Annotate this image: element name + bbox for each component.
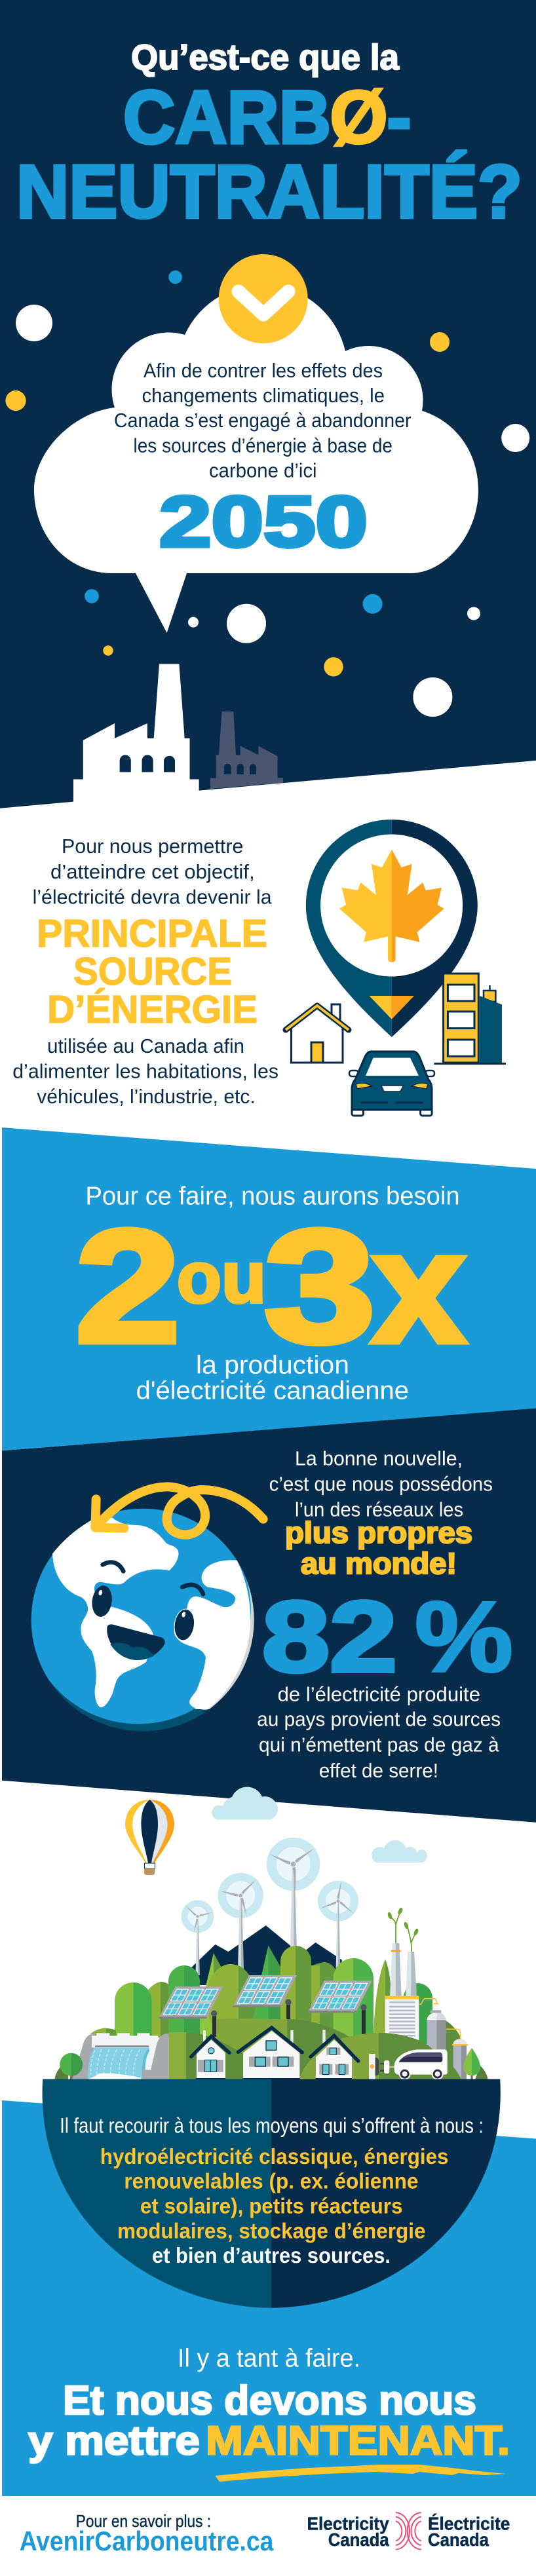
panel: half-disc platform bbox=[43, 2079, 501, 2308]
section text: bonne nouvelle: La bonne nouvelle, bbox=[295, 1447, 463, 1470]
small tree right bbox=[463, 2048, 480, 2079]
section text: objectif: véhicules, l’industrie, etc. bbox=[37, 1085, 256, 1108]
platform text: renouvelables (p. ex. éolienne bbox=[124, 2169, 418, 2193]
cloud text: changements climatiques, le bbox=[142, 384, 385, 407]
closing message: Et nous devons nous bbox=[63, 2378, 476, 2423]
solar panel 2 bbox=[233, 1975, 297, 2020]
section text: bonne nouvelle: l’un des réseaux les bbox=[295, 1498, 463, 1521]
title: NEUTRALITÉ? bbox=[16, 150, 522, 234]
section text: production: la production bbox=[196, 1352, 349, 1380]
closing message: Il y a tant à faire. bbox=[178, 2344, 360, 2372]
hydro dam bbox=[72, 2033, 169, 2079]
title: - bbox=[387, 76, 412, 160]
section text: bonne nouvelle: au monde! bbox=[301, 1547, 457, 1580]
big number: 2 ou 3x: 3 bbox=[264, 1196, 375, 1376]
platform text bbox=[60, 2114, 484, 2267]
section text: bonne nouvelle: plus propres bbox=[285, 1516, 472, 1549]
background: closing blue band bbox=[2, 2100, 536, 2496]
big number: 82 % bbox=[262, 1581, 513, 1693]
icon: hot air balloon bbox=[125, 1800, 174, 1875]
section text: objectif: PRINCIPALE bbox=[37, 912, 267, 955]
icon: map pin with maple leaf bbox=[306, 820, 478, 1037]
year 2050: 2050 bbox=[159, 482, 368, 562]
icon: smiling globe bbox=[31, 1508, 254, 1732]
background: navy band bbox=[2, 1409, 536, 1823]
section text: 82 details: qui n’émettent pas de gaz à bbox=[259, 1733, 499, 1756]
footer: Electricity Canada logo: Canada bbox=[328, 2529, 389, 2550]
arrow: looping yellow arrow bbox=[95, 1487, 263, 1535]
closing message: y mettre bbox=[28, 2419, 200, 2463]
icon: cloud right bbox=[372, 1840, 427, 1863]
icon: cloud left bbox=[212, 1787, 278, 1820]
brush underline bbox=[216, 2465, 506, 2482]
sprout leaves bbox=[387, 1907, 419, 1936]
footer: Electricity Canada logo: Électricite bbox=[428, 2513, 510, 2533]
cloud text: carbone d’ici bbox=[209, 459, 317, 482]
title: CARB bbox=[123, 76, 331, 160]
big number: 2 ou 3x: x bbox=[372, 1199, 465, 1376]
mountains bbox=[188, 1925, 342, 1985]
section text: 82 details: de l’électricité produite bbox=[278, 1683, 480, 1706]
section text: objectif: utilisée au Canada afin bbox=[47, 1034, 244, 1057]
platform text: et bien d’autres sources. bbox=[152, 2243, 391, 2267]
closing message: MAINTENANT. bbox=[206, 2419, 510, 2463]
section text: objectif: SOURCE bbox=[73, 950, 232, 993]
section text: 82 details: au pays provient de sources bbox=[257, 1707, 501, 1731]
section text: production bbox=[136, 1352, 409, 1405]
houses 2 and 3 bbox=[238, 2028, 358, 2079]
cloud text bbox=[114, 359, 412, 482]
title bbox=[16, 37, 522, 234]
section text: bonne nouvelle bbox=[269, 1447, 493, 1580]
section text: objectif bbox=[12, 835, 278, 1108]
footer: Electricity Canada logo bbox=[307, 2512, 510, 2550]
footer: Electricity Canada logo: Electricity bbox=[307, 2513, 389, 2533]
section text: bonne nouvelle: c’est que nous possédons bbox=[269, 1472, 493, 1495]
electric van bbox=[394, 2049, 448, 2080]
house 1 bbox=[191, 2030, 229, 2079]
cloud text: Canada s’est engagé à abandonner bbox=[114, 409, 412, 432]
cloud text: Afin de contrer les effets des bbox=[144, 359, 383, 382]
wind turbine 3 bbox=[181, 1900, 214, 1975]
platform text: hydroélectricité classique, énergies bbox=[100, 2144, 449, 2169]
platform text: modulaires, stockage d’énergie bbox=[117, 2218, 426, 2243]
small tree left bbox=[60, 2053, 83, 2079]
trees back row bbox=[115, 1946, 467, 2081]
icon: house bbox=[286, 1004, 349, 1063]
power plant bbox=[385, 1943, 468, 2079]
section text: production: d'électricité canadienne bbox=[136, 1377, 409, 1405]
plant sprouts bbox=[391, 1912, 416, 1952]
big number: 2 ou 3x bbox=[75, 1196, 465, 1376]
footer: website call to action: AvenirCarboneutre.ca bbox=[20, 2526, 274, 2556]
title: Ø bbox=[330, 76, 388, 160]
section text: objectif: d’atteindre cet objectif, bbox=[50, 860, 255, 883]
solar panel 3 bbox=[308, 1980, 372, 2035]
speech cloud bbox=[34, 285, 478, 633]
cloud text: les sources d’énergie à base de bbox=[134, 434, 392, 457]
section text: objectif: Pour nous permettre bbox=[62, 835, 243, 858]
closing message bbox=[28, 2344, 510, 2463]
icon: grey factory bbox=[210, 711, 283, 789]
footer: website call to action: Pour en savoir plus : bbox=[76, 2511, 211, 2531]
background: navy intro band bbox=[0, 0, 536, 808]
section text: objectif: l’électricité devra devenir la bbox=[33, 886, 272, 909]
wind turbine 2 bbox=[218, 1873, 263, 1969]
title: Qu’est-ce que la bbox=[131, 37, 399, 77]
rolling hills bbox=[55, 2018, 488, 2079]
platform text: et solaire), petits réacteurs bbox=[140, 2194, 402, 2218]
section text: objectif: D’ÉNERGIE bbox=[47, 988, 258, 1031]
EV charger bbox=[369, 2054, 394, 2079]
big number: 82 %: % bbox=[415, 1581, 513, 1693]
big number: 2 ou 3x: 2 bbox=[75, 1196, 180, 1376]
icon: yellow check badge bbox=[219, 254, 308, 343]
icon: white factory bbox=[73, 664, 199, 802]
solar panel 1 bbox=[159, 1986, 223, 2037]
big number: 82 %: 82 bbox=[262, 1581, 397, 1693]
decorative dots: sky bbox=[5, 271, 529, 717]
section text: 82 details bbox=[257, 1683, 501, 1782]
big number: 2 ou 3x: ou bbox=[177, 1238, 266, 1318]
footer: Electricity Canada logo: Canada bbox=[428, 2529, 489, 2550]
background: blue band bbox=[2, 1127, 536, 1450]
illustration: clean energy landscape bbox=[55, 1787, 488, 2081]
wind turbine 1 bbox=[267, 1838, 320, 1949]
section text: 82 details: effet de serre! bbox=[319, 1759, 438, 1782]
section text: besoin: Pour ce faire, nous aurons besoin bbox=[85, 1182, 460, 1211]
wind turbine 4 bbox=[318, 1881, 358, 1972]
footer: website call to action bbox=[20, 2511, 274, 2556]
section text: objectif: d’alimenter les habitations, les bbox=[12, 1059, 278, 1082]
icon: city buildings bbox=[434, 974, 506, 1065]
icon: car bbox=[349, 1051, 434, 1116]
